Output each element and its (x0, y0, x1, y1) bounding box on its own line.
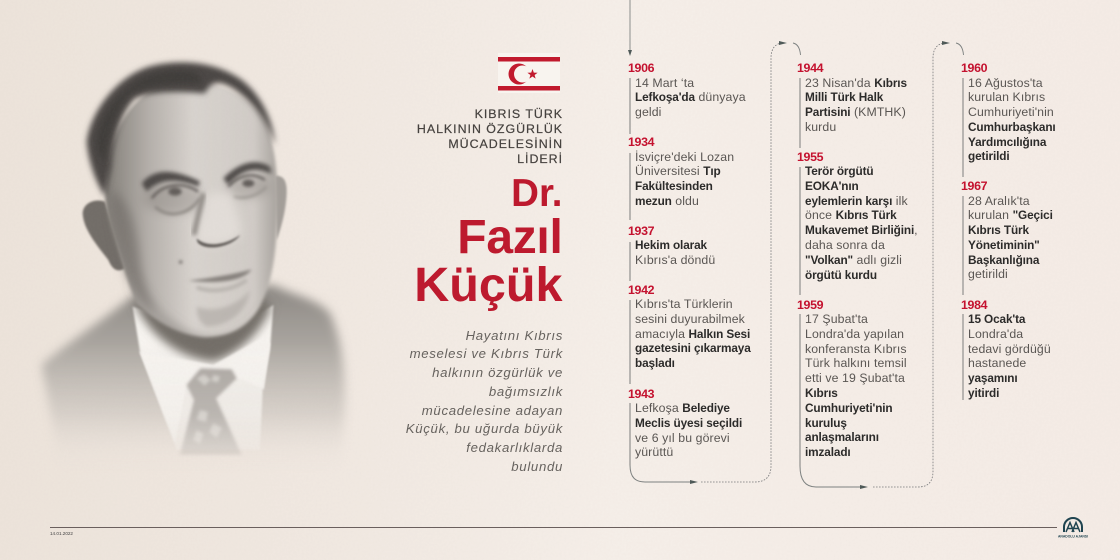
column 3 (961, 61, 1056, 400)
1984 text: yitirdi (968, 386, 999, 400)
1943 year: 1943 (628, 386, 654, 400)
shirt collar (133, 305, 273, 450)
1955 text (805, 164, 918, 282)
hair core (97, 70, 201, 163)
biography: bulundu (511, 459, 563, 474)
1959 text: anlaşmalarını (805, 430, 879, 444)
1984 text: hastanede (968, 356, 1026, 370)
1942 year: 1942 (628, 282, 654, 296)
hair (87, 62, 275, 197)
column 2 bars (799, 78, 801, 466)
1960 text: 16 Ağustos'ta (968, 76, 1043, 90)
entry line with arrow (628, 0, 632, 56)
1984 text: 15 Ocak'ta (968, 312, 1025, 326)
1934 text: mezun oldu (635, 194, 699, 208)
jaw shadow (123, 250, 264, 350)
1959 text (805, 312, 907, 459)
1942 text: amacıyla Halkın Sesi (635, 327, 750, 341)
1960 text: Cumhuriyeti'nin (968, 105, 1054, 119)
1906 text: 14 Mart ‘ta (635, 76, 694, 90)
name: Fazıl: Fazıl (457, 211, 562, 264)
1934 year: 1934 (628, 135, 654, 149)
1934 text (635, 150, 734, 208)
1906 text: geldi (635, 105, 661, 119)
1944 text (805, 76, 907, 134)
1967 text: getirildi (968, 267, 1008, 281)
left eye socket shadow (143, 183, 203, 213)
1934 text: Üniversitesi Tıp (635, 164, 721, 178)
1959 text: etti ve 19 Şubat'ta (805, 371, 905, 385)
tie (180, 368, 242, 455)
name: Dr.: Dr. (511, 172, 562, 215)
right eye socket shadow (227, 175, 270, 198)
1942 text: Kıbrıs'ta Türklerin (635, 297, 733, 311)
1959 text: konferansta Kıbrıs (805, 342, 907, 356)
footer rule (50, 527, 1057, 528)
nose (194, 193, 241, 247)
name: Küçük: Küçük (414, 258, 562, 312)
1959 text: Türk halkını temsil (805, 356, 907, 370)
biography: Hayatını Kıbrıs (466, 328, 563, 342)
cheek shadow (111, 190, 157, 313)
1937 text: Hekim olarak (635, 238, 707, 252)
1906 text (635, 76, 746, 119)
1967 text (968, 194, 1053, 281)
1967 text: Başkanlığına (968, 253, 1039, 267)
1944 text: kurdu (805, 120, 836, 134)
neck shadow (135, 290, 272, 362)
column 2 bottom turn (800, 41, 964, 489)
1960 text: getirildi (968, 149, 1010, 163)
1984 text: tedavi gördüğü (968, 342, 1051, 356)
biography: Küçük, bu uğurda büyük (406, 421, 563, 436)
1955 text: örgütü kurdu (805, 268, 877, 282)
1955 text: Terör örgütü (805, 164, 873, 178)
1959 year: 1959 (797, 298, 823, 312)
Anadolu Ajansı logo (1058, 517, 1088, 539)
subtitle: MÜCADELESİNİN (448, 137, 563, 151)
left ear (83, 200, 125, 270)
1960 text: Cumhurbaşkanı (968, 120, 1056, 134)
right eyebrow (223, 162, 272, 185)
1955 text: EOKA'nın (805, 179, 859, 193)
1960 text: Yardımcılığına (968, 135, 1046, 149)
1942 text: gazetesini çıkarmaya (635, 341, 751, 355)
1955 year: 1955 (797, 150, 823, 164)
1937 text: Kıbrıs'a döndü (635, 253, 715, 267)
1984 text: yaşamını (968, 371, 1018, 385)
biography (406, 328, 563, 474)
suit (38, 280, 349, 440)
1937 year: 1937 (628, 224, 654, 238)
1955 text: eylemlerin karşı ilk (805, 194, 908, 208)
1944 text: Milli Türk Halk (805, 90, 883, 104)
1943 text (635, 401, 742, 459)
left eye (152, 185, 200, 214)
1960 text: kurulan Kıbrıs (968, 90, 1045, 104)
subtitle: LİDERİ (517, 152, 563, 166)
subtitle (417, 107, 563, 166)
1943 text: ve 6 yıl bu görevi (635, 431, 730, 445)
1967 text: 28 Aralık'ta (968, 194, 1030, 208)
collar highlight (139, 343, 271, 408)
1959 text: Londra'da yapılan (805, 327, 904, 341)
biography: mücadelesine adayan (422, 402, 563, 418)
chin shading (197, 290, 250, 327)
1906 year: 1906 (628, 61, 654, 75)
1955 text: "Volkan" adlı gizli (805, 253, 902, 267)
biography: fedakarlıklarda (466, 440, 563, 455)
flag (498, 53, 560, 93)
1960 text (968, 76, 1056, 163)
subtitle: KIBRIS TÜRK (475, 107, 563, 121)
left eyebrow (142, 172, 200, 192)
1906 text: Lefkoşa'da dünyaya (635, 90, 746, 104)
1944 text: 23 Nisan'da Kıbrıs (805, 76, 907, 90)
face (105, 81, 278, 337)
background and portrait (0, 0, 354, 560)
1944 text: Partisini (KMTHK) (805, 105, 906, 119)
column 2 (797, 61, 918, 459)
1984 text: Londra'da (968, 327, 1023, 341)
1955 text: Mukavemet Birliğini, (805, 223, 918, 237)
1943 text: Lefkoşa Belediye (635, 401, 730, 415)
1942 text: sesini duyurabilmek (635, 312, 745, 326)
column 1 bottom turn (630, 41, 800, 484)
date: 14.01.2022 (50, 531, 73, 536)
biography: meselesi ve Kıbrıs Türk (410, 346, 563, 361)
1955 text: daha sonra da (805, 238, 885, 252)
1967 year: 1967 (961, 179, 987, 193)
1937 text (635, 238, 715, 267)
1934 text: Fakültesinden (635, 179, 713, 193)
1942 text (635, 297, 751, 370)
1959 text: kuruluş (805, 416, 847, 430)
1984 year: 1984 (961, 298, 987, 312)
1959 text: Cumhuriyeti'nin (805, 401, 893, 415)
1943 text: Meclis üyesi seçildi (635, 416, 742, 430)
1959 text: imzaladı (805, 445, 851, 459)
1944 year: 1944 (797, 61, 823, 75)
1967 text: Yönetiminin" (968, 238, 1040, 252)
1959 text: 17 Şubat'ta (805, 312, 868, 326)
right ear (275, 176, 287, 240)
1984 text (968, 312, 1051, 400)
column 1 (628, 61, 751, 459)
right eye (228, 175, 267, 198)
column 3 bars (962, 78, 964, 400)
1967 text: kurulan "Geçici (968, 208, 1053, 222)
subtitle: HALKININ ÖZGÜRLÜK (417, 122, 563, 136)
1959 text: Kıbrıs (805, 386, 838, 400)
1942 text: başladı (635, 356, 675, 370)
mouth (179, 260, 252, 290)
1934 text: İsviçre'deki Lozan (635, 150, 734, 164)
column 1 bars (629, 78, 631, 465)
1967 text: Kıbrıs Türk (968, 223, 1029, 237)
1943 text: yürüttü (635, 445, 673, 459)
1955 text: önce Kıbrıs Türk (805, 208, 897, 222)
biography: halkının özgürlük ve (432, 365, 563, 380)
biography: bağımsızlık (489, 384, 563, 399)
1960 year: 1960 (961, 61, 987, 75)
